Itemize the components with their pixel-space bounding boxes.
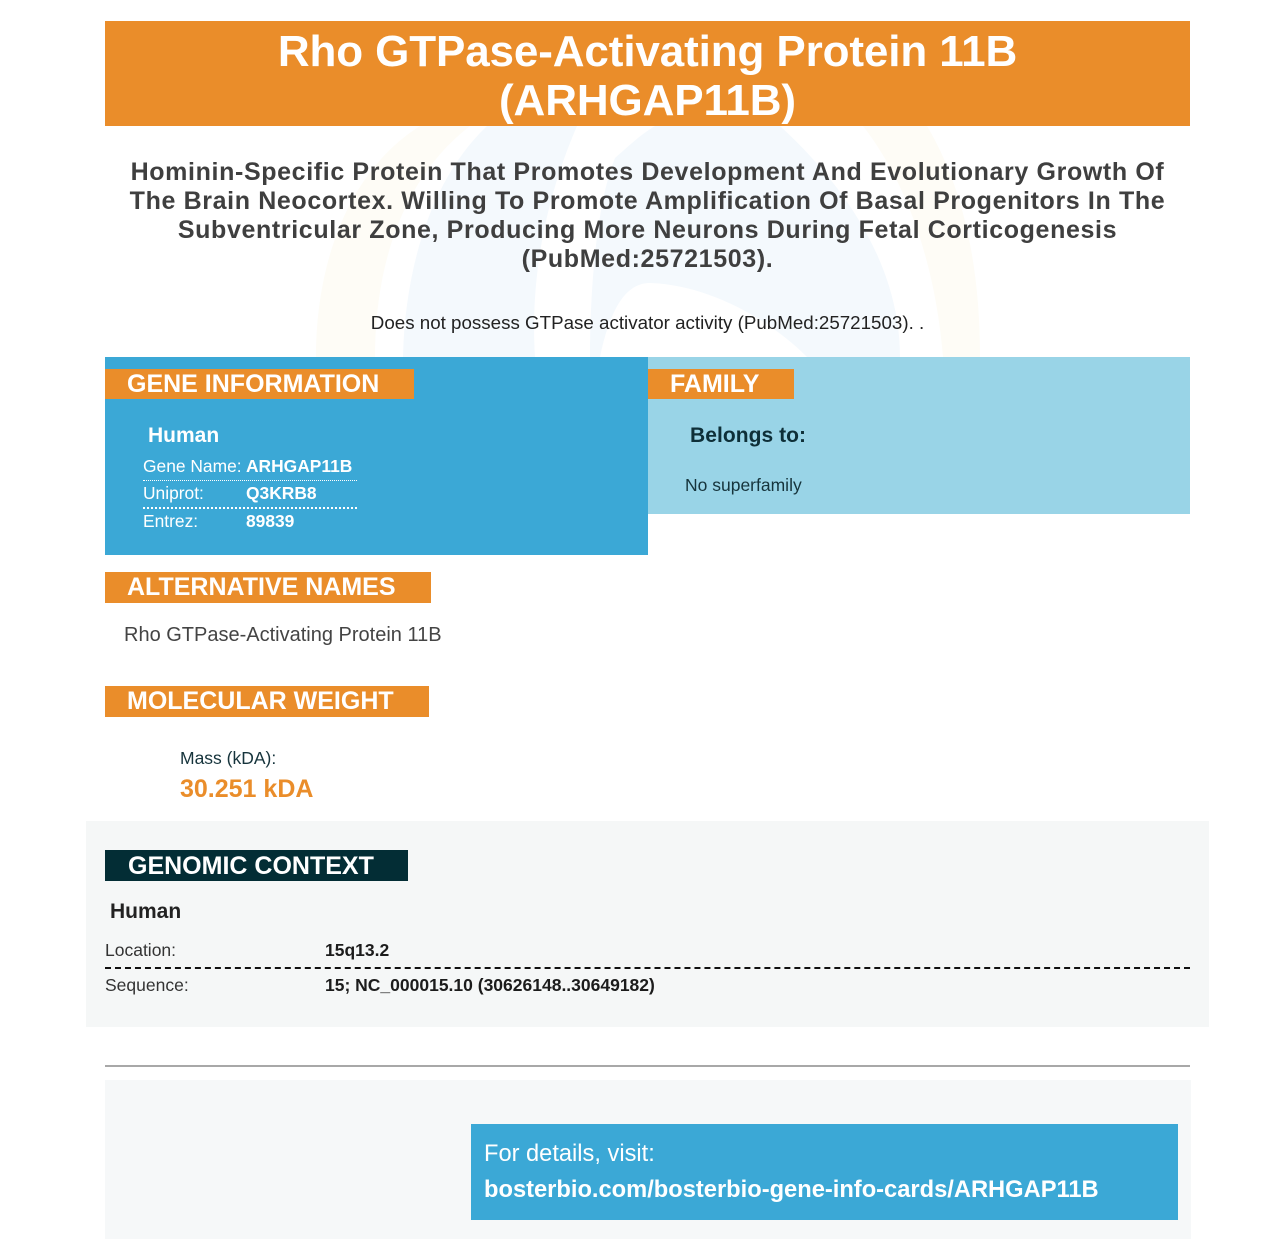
- entrez row: [143, 511, 294, 531]
- location row: Location:: [105, 940, 176, 960]
- background watermark logo: [316, 126, 980, 357]
- heading: genomic context: GENOMIC CONTEXT: [128, 852, 374, 880]
- title banner: [105, 21, 1190, 126]
- location row: 15q13.2: [325, 940, 389, 960]
- subtitle description: [130, 158, 1165, 273]
- subtitle description: Subventricular Zone, Producing More Neurons During Fetal Corticogenesis: [178, 216, 1117, 244]
- belongs to label: Belongs to:: [690, 424, 806, 447]
- gene name row: Gene Name:: [143, 456, 242, 476]
- species label: Human: [148, 424, 219, 447]
- location row: [105, 939, 1190, 969]
- heading: family: [648, 369, 794, 399]
- activity note: Does not possess GTPase activator activity (PubMed:25721503). .: [371, 312, 924, 333]
- url: bosterbio.com/bosterbio-gene-info-cards/ARHGAP11B: [484, 1177, 1099, 1203]
- heading: gene information: GENE INFORMATION: [127, 370, 379, 398]
- mass value: 30.251 kDA: [180, 775, 313, 803]
- gene name row: [143, 455, 357, 481]
- subtitle description: Hominin-Specific Protein That Promotes Development And Evolutionary Growth Of: [131, 158, 1164, 186]
- callout: details link: [471, 1124, 1178, 1220]
- subtitle description: The Brain Neocortex. Willing To Promote Amplification Of Basal Progenitors In The: [130, 187, 1165, 215]
- panel: genomic context: [86, 821, 1209, 1027]
- panel: footer: [105, 1080, 1191, 1239]
- heading: family: FAMILY: [670, 370, 759, 398]
- title: (ARHGAP11B): [499, 76, 796, 125]
- visit label: For details, visit:: [484, 1141, 655, 1167]
- mass label: Mass (kDA):: [180, 748, 276, 768]
- panel: family: [648, 357, 1190, 514]
- gene name row: ARHGAP11B: [246, 456, 352, 476]
- species label: Human: [110, 900, 181, 923]
- uniprot row: Q3KRB8: [246, 483, 317, 503]
- heading: alternative names: ALTERNATIVE NAMES: [127, 573, 396, 601]
- superfamily value: No superfamily: [685, 475, 802, 495]
- entrez row: Entrez:: [143, 511, 198, 531]
- heading: molecular weight: MOLECULAR WEIGHT: [127, 687, 394, 715]
- divider line: [105, 1065, 1190, 1067]
- alternative name value: Rho GTPase-Activating Protein 11B: [124, 624, 442, 646]
- title: [278, 27, 1017, 125]
- title: Rho GTPase-Activating Protein 11B: [278, 27, 1017, 76]
- sequence row: Sequence:: [105, 975, 189, 995]
- uniprot row: Uniprot:: [143, 483, 204, 503]
- uniprot row: [143, 482, 357, 509]
- subtitle description: (PubMed:25721503).: [522, 245, 773, 273]
- sequence row: 15; NC_000015.10 (30626148..30649182): [325, 975, 655, 995]
- entrez row: 89839: [246, 511, 294, 531]
- panel: gene information: [105, 357, 648, 555]
- sequence row: [105, 975, 655, 995]
